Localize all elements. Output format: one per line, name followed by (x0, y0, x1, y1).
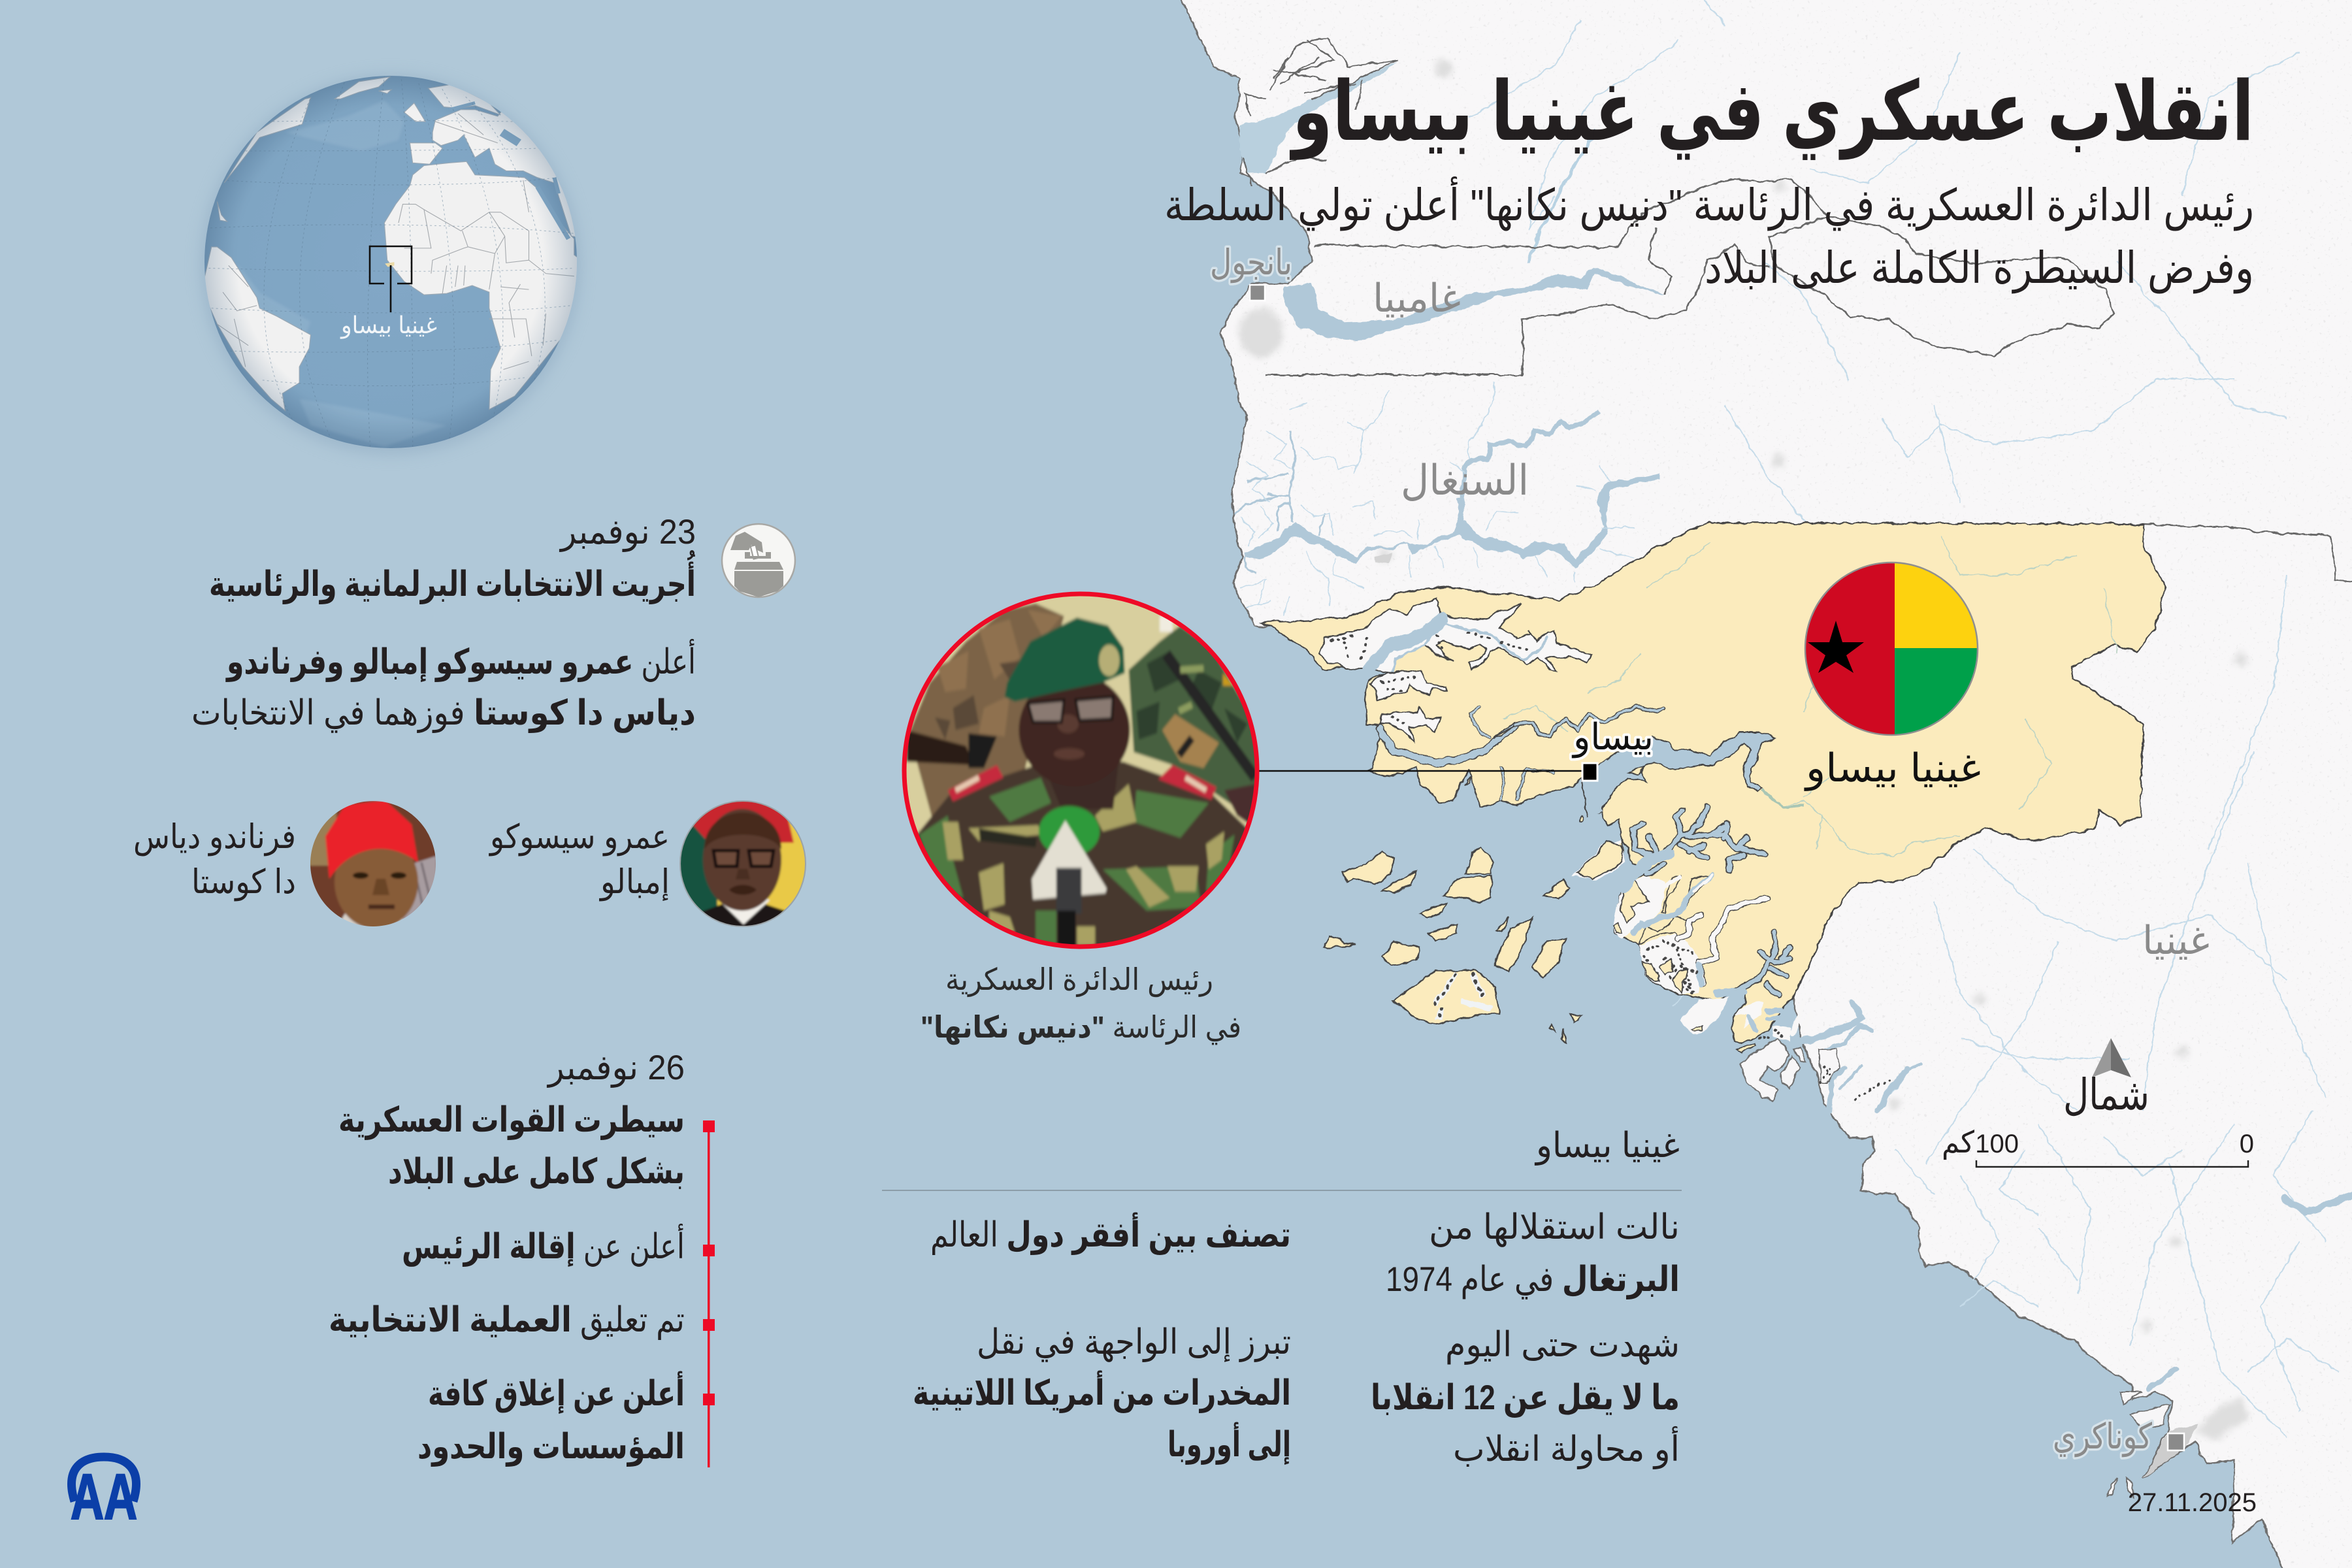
fact: coups: شهدت حتى اليوم (1445, 1326, 1680, 1365)
left soldier (909, 604, 1064, 834)
Guinea-Bissau inland rivers (1503, 536, 2117, 856)
label: Banjul (1210, 243, 1292, 301)
Guinea-Bissau mainland (1262, 523, 2166, 1043)
fact: coups (1371, 1326, 1680, 1469)
scale bar: 0 (2240, 1130, 2254, 1158)
shoulder boards (948, 765, 1004, 802)
scale bar: كم (1942, 1125, 1974, 1160)
Cacheu estuary and mangroves (1319, 598, 1664, 822)
right soldier (1160, 616, 1173, 632)
ocean shelves (237, 100, 447, 447)
subtitle: وفرض السيطرة الكاملة على البلاد (1705, 244, 2254, 294)
flag star (1808, 621, 1864, 673)
connector from photo to Bissau (1258, 770, 1584, 772)
name: Fernando Dias da Costa (133, 818, 296, 902)
fact: drug route (913, 1323, 1291, 1465)
name: Fernando Dias da Costa: دا كوستا (191, 863, 296, 902)
name: Umaro Sissoco Embalo: عمرو سيسوكو (488, 818, 670, 857)
Gambia river estuary (1240, 37, 2114, 375)
photo: Umaro Sissoco Embalo (679, 800, 807, 928)
photo: Denis N'Canha (899, 587, 1263, 955)
Geba estuary (1582, 732, 1775, 817)
fact: poverty: تصنف بين أفقر دول العالم (930, 1212, 1291, 1255)
urban patches (1239, 59, 2249, 1441)
date: 26 نوفمبر (546, 1049, 685, 1088)
fact: coups: ما لا يقل عن 12 انقلابا (1371, 1379, 1680, 1418)
fact: drug route: إلى أوروبا (1168, 1422, 1291, 1465)
marker: Bissau (1582, 763, 1597, 781)
event: electoral process suspended: تم تعليق العملية الانتخابية (329, 1301, 685, 1340)
rivers (1470, 0, 2339, 1437)
uniform (904, 762, 1247, 955)
timeline line (703, 1120, 715, 1467)
Guinea coast islands (2107, 1392, 2169, 1496)
country label: Guinea-Bissau: غينيا بيساو (1804, 746, 1981, 791)
north arrow: شمال (2063, 1070, 2149, 1119)
section: November 23 election (191, 513, 795, 733)
fact: independence: نالت استقلالها من (1429, 1208, 1680, 1247)
label: Gambia: غامبيا (1373, 276, 1461, 320)
Guinea north border (2144, 524, 2352, 585)
north arrow (2063, 1038, 2149, 1119)
subtitle (1164, 176, 2254, 294)
globe label: غينيا بيساو (340, 312, 437, 339)
event: forces took control: بشكل كامل على البلاد (388, 1152, 685, 1191)
panel: Guinea-Bissau facts (882, 1126, 1682, 1469)
label: Banjul: بانجول (1210, 243, 1292, 283)
event: president dismissed: أعلن عن إقالة الرئيس (402, 1224, 685, 1267)
event: closures (417, 1371, 685, 1467)
date: 27.11.2025 (2128, 1488, 2257, 1517)
locator globe (201, 75, 589, 454)
neck and face (1046, 765, 1119, 809)
logo: Anadolu Agency: AA (71, 1461, 137, 1533)
Casamance river system (1234, 381, 1659, 614)
upper river (1529, 130, 1596, 263)
borders (1315, 178, 2114, 356)
fact: independence: البرتغال في عام 1974 (1386, 1260, 1680, 1299)
date: 23 نوفمبر (559, 513, 696, 552)
panel heading: غينيا بيساو (1534, 1126, 1680, 1166)
photo caption (921, 962, 1241, 1045)
fact: independence (1386, 1208, 1680, 1299)
name: Umaro Sissoco Embalo (488, 818, 670, 902)
land: Senegal, Gambia, Guinea (1181, 0, 2352, 1568)
scale bar (1942, 1125, 2254, 1167)
heading: أُجريت الانتخابات البرلمانية والرئاسية (209, 550, 696, 604)
map: West African coast (1176, 0, 2352, 1568)
photo caption: رئيس الدائرة العسكرية (945, 962, 1213, 998)
fact: drug route: تبرز إلى الواجهة في نقل (977, 1323, 1291, 1362)
name: Umaro Sissoco Embalo: إمبالو (598, 863, 670, 902)
red frame (904, 594, 1257, 947)
label: Senegal: السنغال (1401, 457, 1529, 504)
logo: Anadolu Agency (71, 1457, 137, 1533)
city label: Bissau: بيساو (1571, 716, 1654, 759)
name: Fernando Dias da Costa: فرناندو دياس (133, 818, 296, 857)
borders (217, 114, 574, 370)
event: closures: المؤسسات والحدود (417, 1428, 685, 1467)
Conakry peninsula (2142, 1424, 2198, 1478)
icon: ballot box (722, 524, 795, 597)
event: closures: أعلن عن إغلاق كافة (428, 1371, 685, 1414)
Bijagos islands (1324, 841, 1626, 1042)
event: forces took control (338, 1101, 685, 1191)
label: Guinea: غينيا (2142, 919, 2210, 962)
fact: coups: أو محاولة انقلاب (1453, 1426, 1680, 1469)
photo: Fernando Dias da Costa (307, 800, 438, 929)
photo caption: في الرئاسة "دنيس نكانها" (921, 1010, 1241, 1045)
announcement: دياس دا كوستا فوزهما في الانتخابات (191, 694, 696, 733)
inland seas (449, 103, 568, 239)
continents (203, 77, 589, 411)
Guinea-Bissau on globe (385, 262, 394, 267)
label: Conakry: كوناكري (2053, 1417, 2152, 1457)
announcement (191, 639, 696, 733)
Guinea coastal estuaries and islands (1740, 1002, 1921, 1111)
fact: drug route: المخدرات من أمريكا اللاتينية (913, 1370, 1291, 1413)
graticule (206, 76, 574, 447)
beret (1005, 617, 1125, 702)
announcement: أعلن عمرو سيسوكو إمبالو وفرناندو (225, 639, 696, 682)
flag of Guinea-Bissau (1803, 561, 1980, 737)
Saloum delta (1240, 61, 1397, 173)
section: November 26 timeline (329, 1049, 715, 1467)
locator frame (370, 246, 412, 312)
scale bar: 100 (1975, 1130, 2019, 1158)
southern fjords and mangroves (1594, 806, 1790, 1053)
terrain speckle (1176, 0, 2352, 1568)
glasses (1028, 697, 1113, 722)
microphone (1039, 806, 1100, 857)
event: forces took control: سيطرت القوات العسكرية (338, 1101, 685, 1140)
